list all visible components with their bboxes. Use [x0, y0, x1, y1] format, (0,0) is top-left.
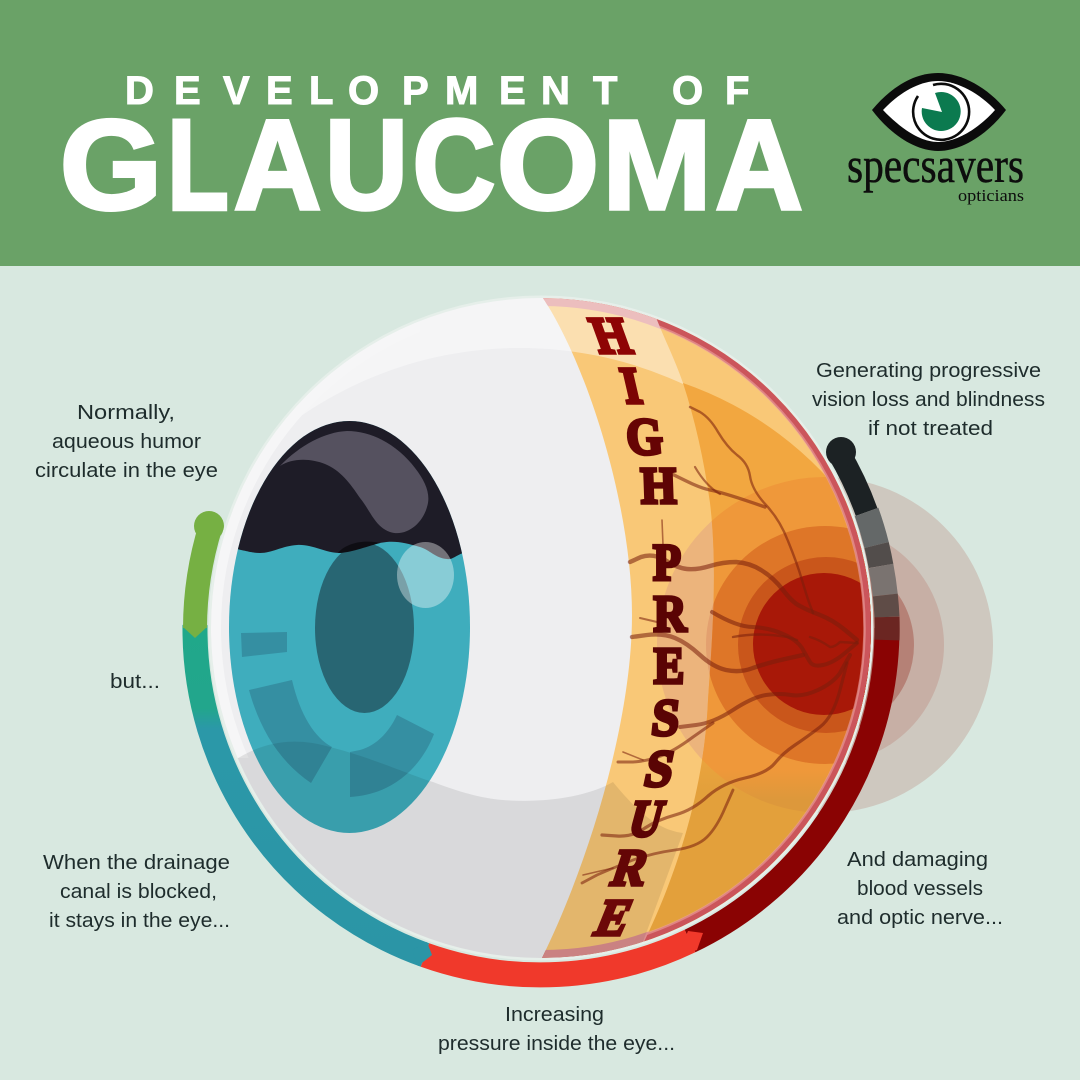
label: drainage canal blocked: it stays in the eye... [49, 910, 230, 932]
iris top dark shadow [238, 421, 462, 560]
title: U [325, 93, 408, 236]
progress ring around eye [183, 437, 887, 975]
label: increasing pressure [438, 1004, 675, 1055]
ring: red segment [412, 931, 703, 975]
label: normally: Normally, [77, 402, 175, 424]
label: vision loss: Generating progressive [816, 360, 1041, 382]
vertical text: HIGH PRESSURE: H [582, 307, 639, 364]
vertical text: HIGH PRESSURE: U [623, 790, 670, 848]
label: increasing pressure: Increasing [505, 1004, 604, 1026]
rim [542, 298, 871, 958]
title: M [602, 93, 712, 237]
title: C [412, 93, 496, 236]
ring: green and teal-green top [195, 625, 425, 955]
label: normally: circulate in the eye [35, 460, 218, 482]
label: damaging vessels: blood vessels [857, 878, 983, 900]
title: L [168, 94, 228, 237]
title: A [234, 94, 321, 237]
ring: dark red segment [690, 628, 887, 941]
label: increasing pressure: pressure inside the eye... [438, 1033, 675, 1055]
label: normally [35, 402, 218, 482]
header banner [0, 0, 1080, 266]
label: drainage canal blocked: When the drainage [43, 852, 230, 874]
label: normally: aqueous humor [52, 431, 201, 453]
ring: green segment [183, 511, 224, 638]
pupil [315, 543, 414, 713]
vertical text: HIGH PRESSURE: R [653, 584, 687, 643]
pressure waves: concentric circles behind eye [657, 477, 993, 813]
vertical text: HIGH PRESSURE: H [640, 456, 677, 515]
vertical text: HIGH PRESSURE: E [654, 636, 684, 695]
title: G [60, 93, 162, 237]
logo: specsavers: specsavers [847, 137, 1024, 193]
iris [220, 410, 480, 833]
retina blood vessels [582, 407, 857, 883]
label: vision loss: vision loss and blindness [812, 389, 1045, 411]
label: damaging vessels: and optic nerve... [837, 907, 1003, 929]
label: damaging vessels: And damaging [847, 849, 988, 871]
label: damaging vessels [837, 849, 1003, 929]
back of eye: retina section [542, 298, 871, 958]
logo: specsavers [847, 73, 1024, 205]
eyeball lower shading [238, 742, 683, 958]
title: DEVELOPMENT OF [125, 69, 749, 113]
sclera [208, 296, 874, 960]
logo: specsavers: opticians [958, 186, 1024, 205]
top highlight on eyeball [216, 298, 683, 749]
label: drainage canal blocked [43, 852, 230, 932]
ring: black segment [826, 437, 887, 640]
iris light spot [397, 542, 454, 608]
title: O [497, 93, 599, 237]
vertical text: HIGH PRESSURE: E [587, 889, 641, 947]
vertical text: HIGH PRESSURE: P [653, 533, 681, 592]
title [60, 69, 803, 237]
vertical text: HIGH PRESSURE [582, 307, 687, 947]
iris reflection [280, 431, 428, 533]
vertical text: HIGH PRESSURE: G [624, 408, 665, 466]
vertical text: HIGH PRESSURE: I [615, 356, 647, 414]
label: vision loss: if not treated [868, 418, 993, 440]
vertical text: HIGH PRESSURE: S [649, 690, 682, 747]
label: but: but... [110, 671, 160, 693]
pressure glow on outer band [657, 484, 843, 759]
iris flecks [241, 632, 434, 797]
vertical text: HIGH PRESSURE: R [605, 839, 657, 896]
label: drainage canal blocked: canal is blocked, [60, 881, 217, 903]
eyeball [208, 296, 874, 960]
label: vision loss [812, 360, 1045, 440]
vertical text: HIGH PRESSURE: S [640, 740, 679, 798]
retina inner layer with pressure rings [644, 383, 871, 942]
title: A [715, 94, 803, 237]
